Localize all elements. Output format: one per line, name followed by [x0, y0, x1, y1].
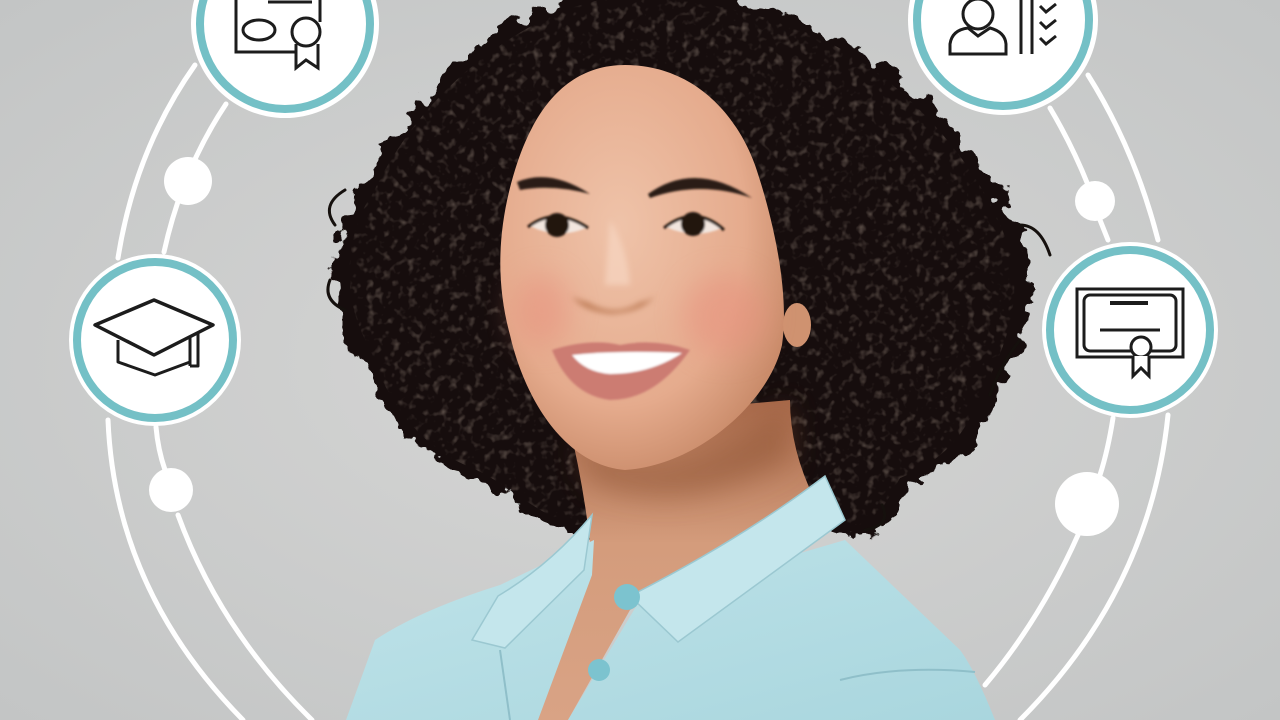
eyes [528, 212, 724, 237]
face [500, 65, 784, 470]
stray curls [328, 190, 1050, 530]
nose [572, 220, 656, 314]
eyebrows [517, 177, 590, 194]
connector dots [149, 157, 1119, 536]
portrait [328, 0, 1050, 720]
mouth [552, 342, 690, 400]
icon badge: certificate with rosette [191, 0, 379, 118]
neck [535, 400, 815, 720]
ear [783, 303, 811, 347]
icon badge: graduation cap [69, 254, 241, 426]
collar [630, 476, 845, 642]
shirt buttons [614, 584, 640, 610]
orbit arcs [108, 65, 1168, 720]
hair [328, 0, 1050, 536]
cheek blush [514, 274, 767, 355]
shirt [346, 476, 995, 720]
icon badge: person with checklist [908, 0, 1098, 115]
chin shadow [578, 405, 790, 496]
icon badge: diploma with seal [1042, 242, 1218, 418]
